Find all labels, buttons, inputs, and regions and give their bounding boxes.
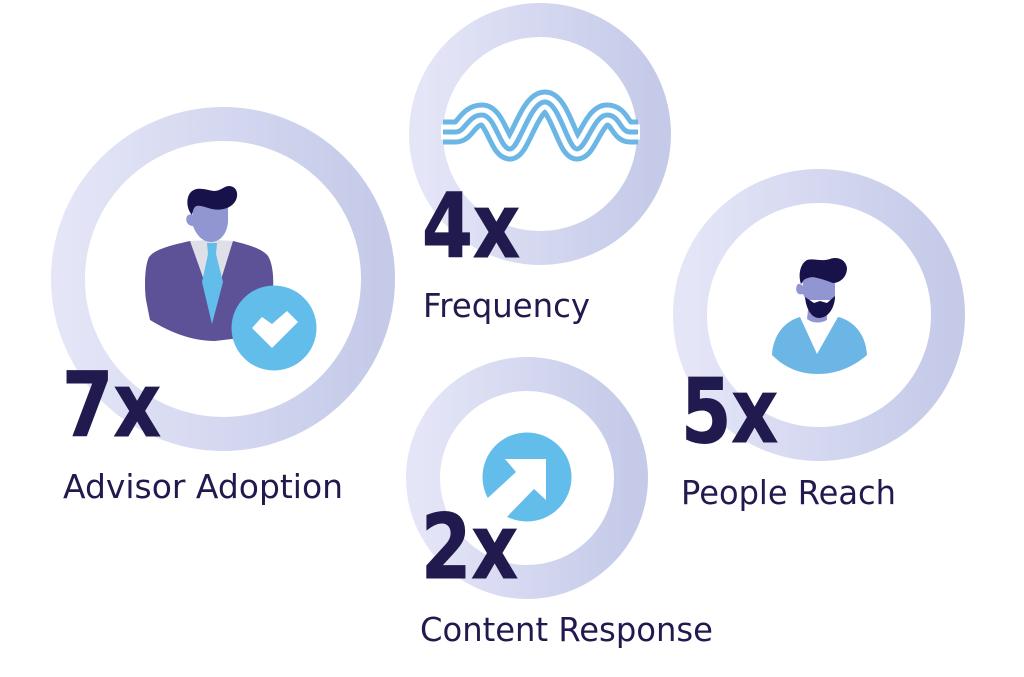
circle xyxy=(482,432,572,522)
neck xyxy=(807,310,827,323)
value: 2x: 2x xyxy=(421,495,518,599)
ring: advisor adoption xyxy=(68,124,378,434)
icon: wave xyxy=(441,102,640,149)
label: advisor adoption: Advisor Adoption xyxy=(63,468,343,506)
check mark xyxy=(252,311,298,348)
shoulders xyxy=(772,317,867,374)
hair xyxy=(800,258,847,284)
label: people reach: People Reach xyxy=(681,474,896,512)
value: 7x: 7x xyxy=(62,353,161,457)
tie xyxy=(202,243,223,324)
icon: advisor with check badge xyxy=(145,186,316,370)
hair xyxy=(187,186,237,215)
arrow xyxy=(478,459,546,526)
value: 4x: 4x xyxy=(422,174,520,278)
panel: people reach xyxy=(681,186,948,512)
shirt collar xyxy=(190,240,233,323)
ring: frequency xyxy=(426,20,654,248)
label: content response: Content Response xyxy=(420,611,713,649)
label: frequency: Frequency xyxy=(423,287,590,325)
panel: content response xyxy=(420,374,713,649)
beard xyxy=(805,296,835,318)
value: 5x: 5x xyxy=(681,359,778,463)
panel: frequency xyxy=(422,20,654,325)
icon: bearded person xyxy=(772,258,867,374)
ring: content response xyxy=(423,374,631,582)
suit xyxy=(145,241,273,341)
ring: people reach xyxy=(690,186,948,444)
face xyxy=(796,278,835,300)
face xyxy=(186,205,228,242)
panel: advisor adoption xyxy=(62,124,378,506)
check badge xyxy=(232,286,316,370)
icon: arrow in circle xyxy=(478,432,572,526)
